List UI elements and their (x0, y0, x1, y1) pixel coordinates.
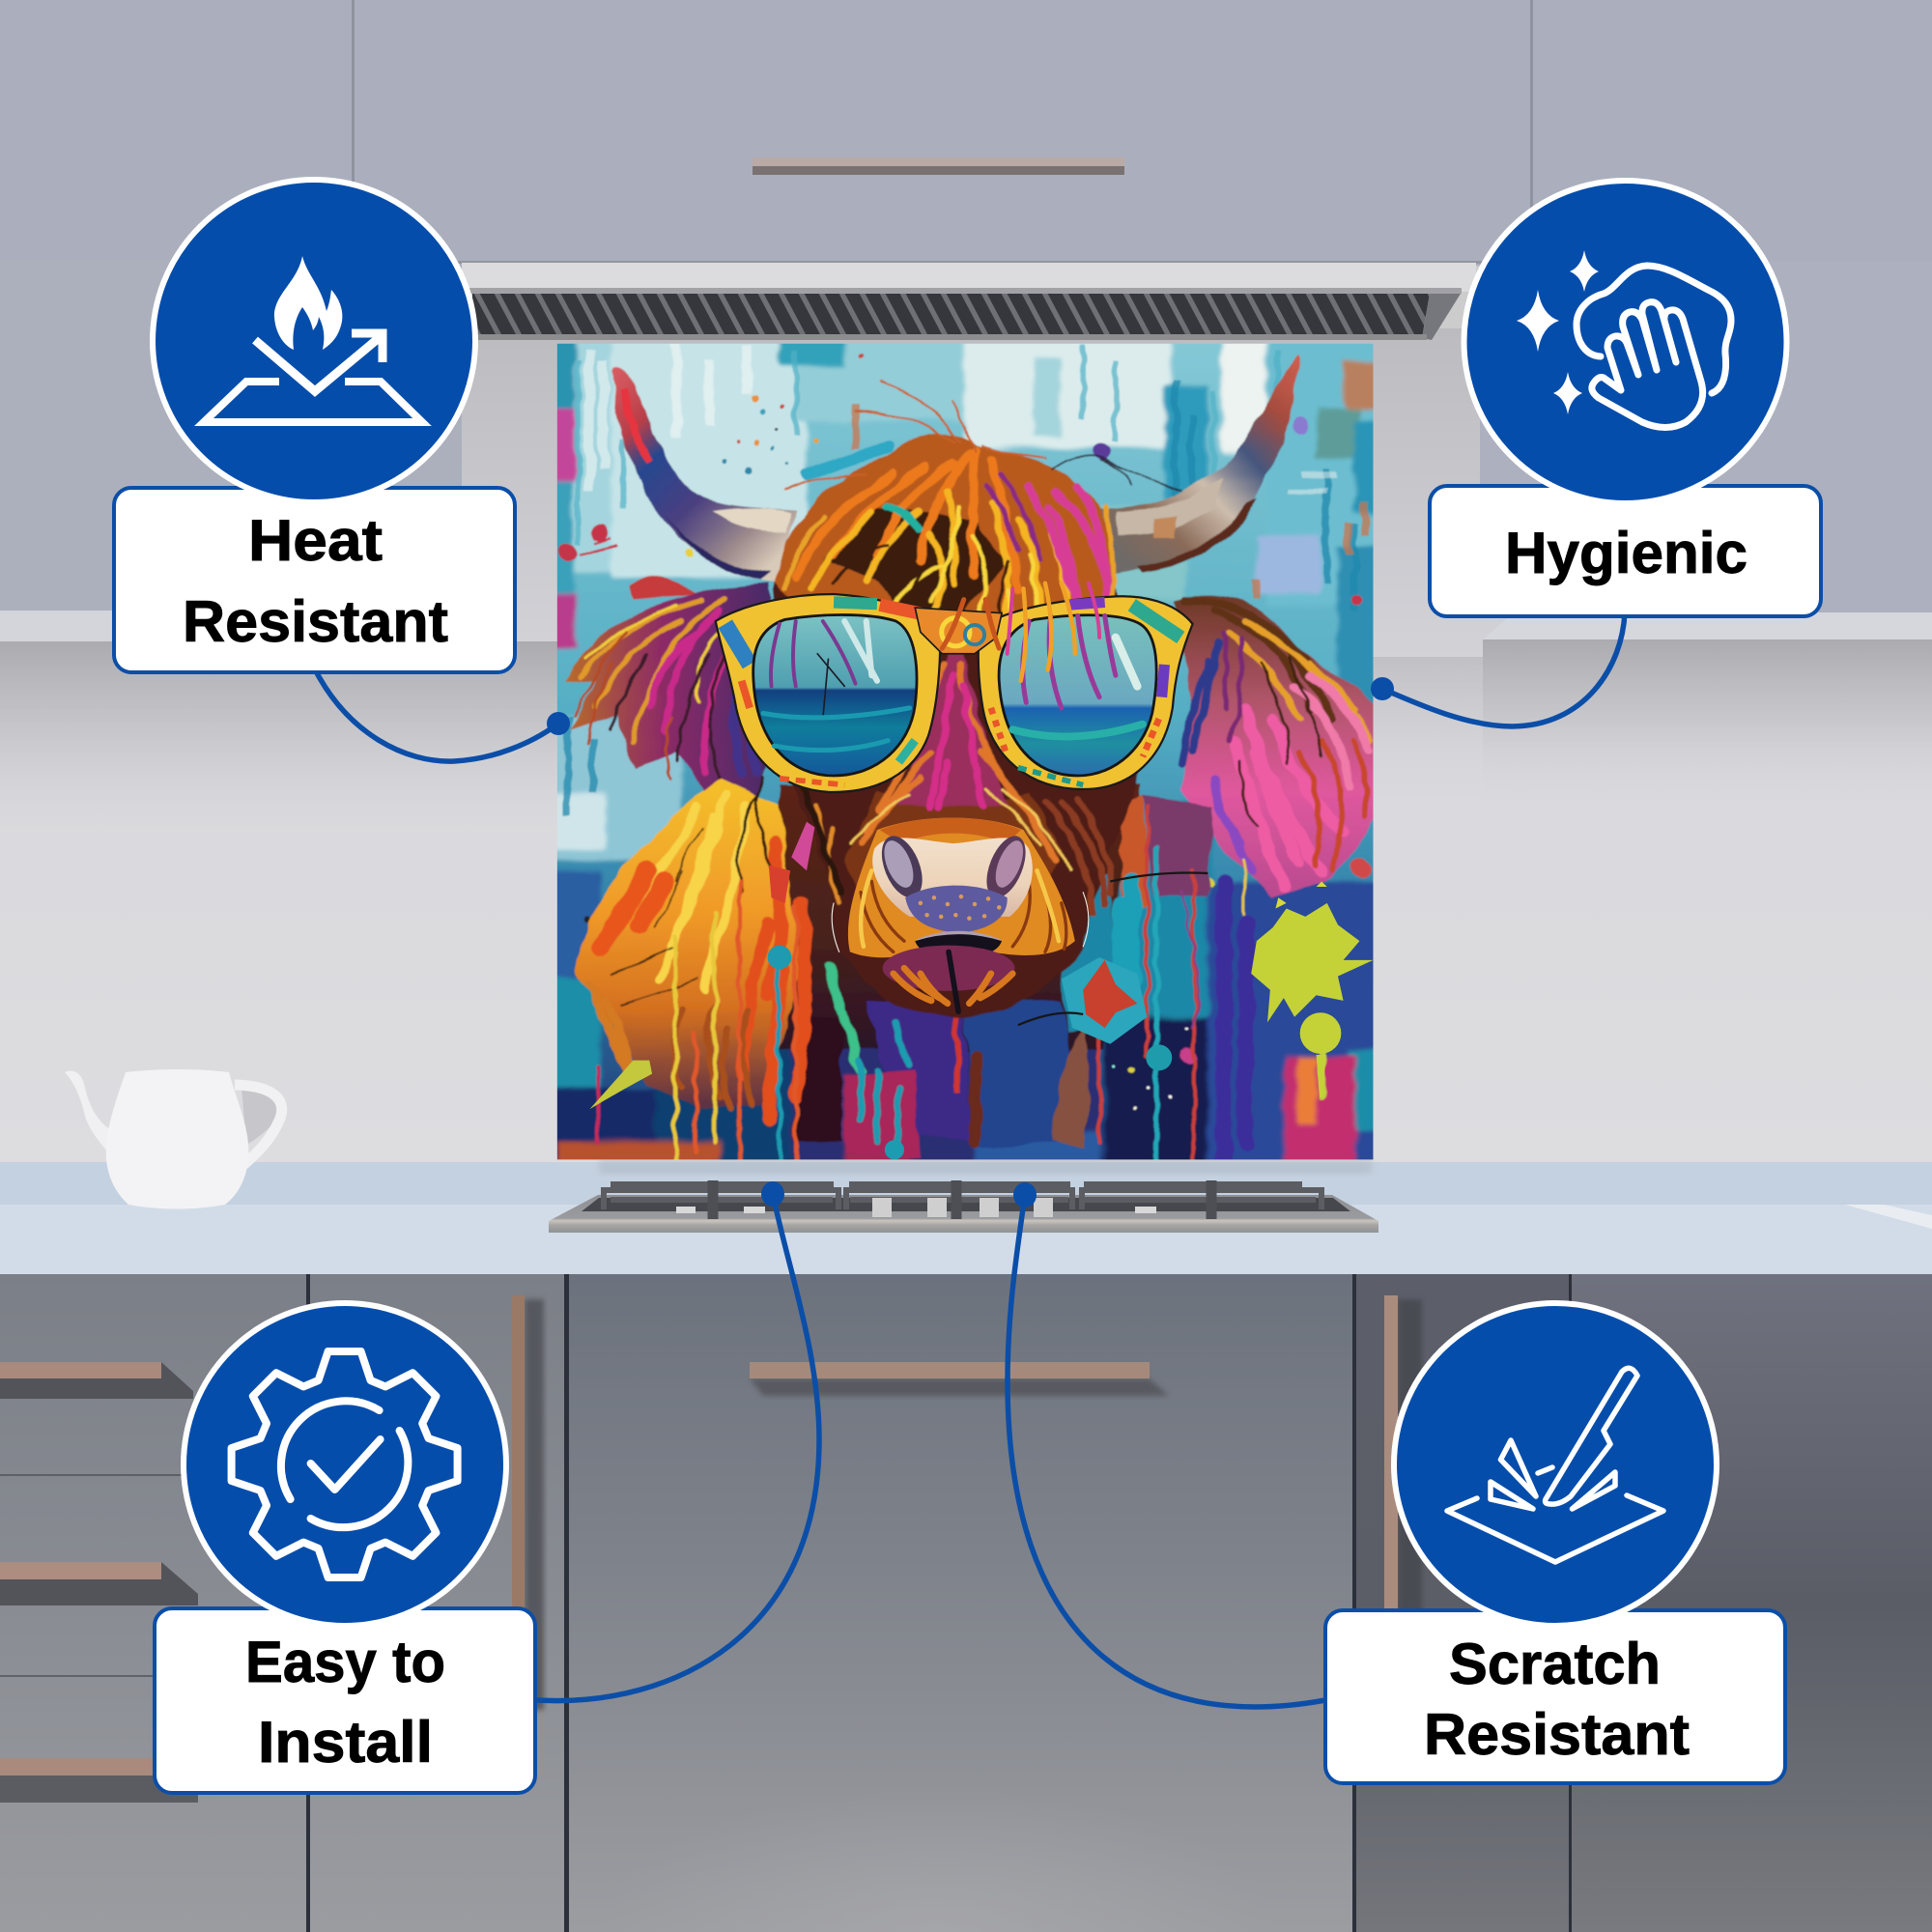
callout: hygienic (1430, 181, 1821, 616)
body and neck (780, 783, 1213, 1158)
wall (0, 328, 1932, 1169)
forelock (774, 379, 1182, 615)
right lens frame (979, 596, 1193, 789)
bridge (915, 608, 1002, 654)
teal drops (768, 946, 791, 969)
left horn (612, 368, 796, 583)
label box (114, 488, 515, 672)
hair falling over glasses (942, 583, 1099, 681)
lower left yellow mane (576, 779, 806, 1120)
lower cabinets (0, 1274, 1932, 1932)
left lens (753, 615, 917, 776)
label text: Easy to (245, 1630, 445, 1694)
callout: heat resistant (114, 180, 515, 672)
callout: scratch resistant (1325, 1303, 1785, 1783)
circle badge (184, 1303, 506, 1626)
label text (183, 508, 448, 654)
small yellow splat (590, 1061, 652, 1109)
circle badge (1464, 181, 1787, 503)
background splatters (557, 353, 1371, 1111)
circle badge (1394, 1303, 1717, 1626)
painting background (541, 328, 1391, 1179)
label box (155, 1608, 535, 1793)
lower colour blocks (954, 1001, 1090, 1147)
label text: Hygienic (1505, 521, 1747, 585)
label text (1424, 1632, 1690, 1767)
icon: flame over deflected arrow (204, 256, 422, 422)
connector: scratch resistant (1008, 1182, 1325, 1707)
upper lip (905, 886, 1008, 933)
right lens (999, 615, 1156, 776)
extractor hood (462, 263, 1476, 340)
head (772, 578, 1142, 1017)
icon: hand wiping with sparkles (1517, 250, 1731, 427)
painting: colourful highland cow in sunglasses (541, 328, 1391, 1179)
icon: gear with check mark (232, 1351, 458, 1577)
right ear hair (1176, 595, 1381, 897)
label text: Resistant (183, 589, 448, 654)
teapot (65, 1069, 282, 1209)
sunglasses (716, 583, 1193, 792)
icon: knife scratching a surface (1447, 1368, 1663, 1562)
chin (883, 946, 1015, 991)
left lens frame (716, 594, 940, 792)
lens reflections (763, 615, 1143, 751)
label text: Install (258, 1710, 433, 1775)
connector: easy to install (537, 1181, 819, 1701)
lower cabinet handles (0, 1295, 1422, 1803)
muzzle (832, 818, 1089, 1011)
background streaks (568, 345, 1365, 816)
paint drips (598, 806, 1321, 1179)
label box (1325, 1610, 1785, 1783)
countertop (0, 1160, 1932, 1275)
connector: heat resistant (314, 668, 570, 761)
cooktop (549, 1180, 1378, 1233)
upper cabinets (0, 0, 1932, 835)
circle badge (153, 180, 475, 502)
paint splats (590, 822, 1373, 1159)
label text: Scratch (1449, 1632, 1661, 1696)
right horn (1099, 355, 1300, 575)
yellow green splat (1251, 903, 1373, 1022)
label text: Resistant (1424, 1702, 1690, 1767)
cabinet handle (753, 157, 1124, 175)
connector: hygienic (1371, 611, 1625, 726)
label text (245, 1630, 445, 1775)
label text: Heat (248, 508, 383, 573)
red teal splat (1062, 957, 1147, 1044)
left ear hair (565, 583, 785, 800)
label box (1430, 486, 1821, 616)
nose (872, 838, 1033, 917)
callout: easy to install (155, 1303, 535, 1793)
frame pattern (725, 602, 1180, 785)
